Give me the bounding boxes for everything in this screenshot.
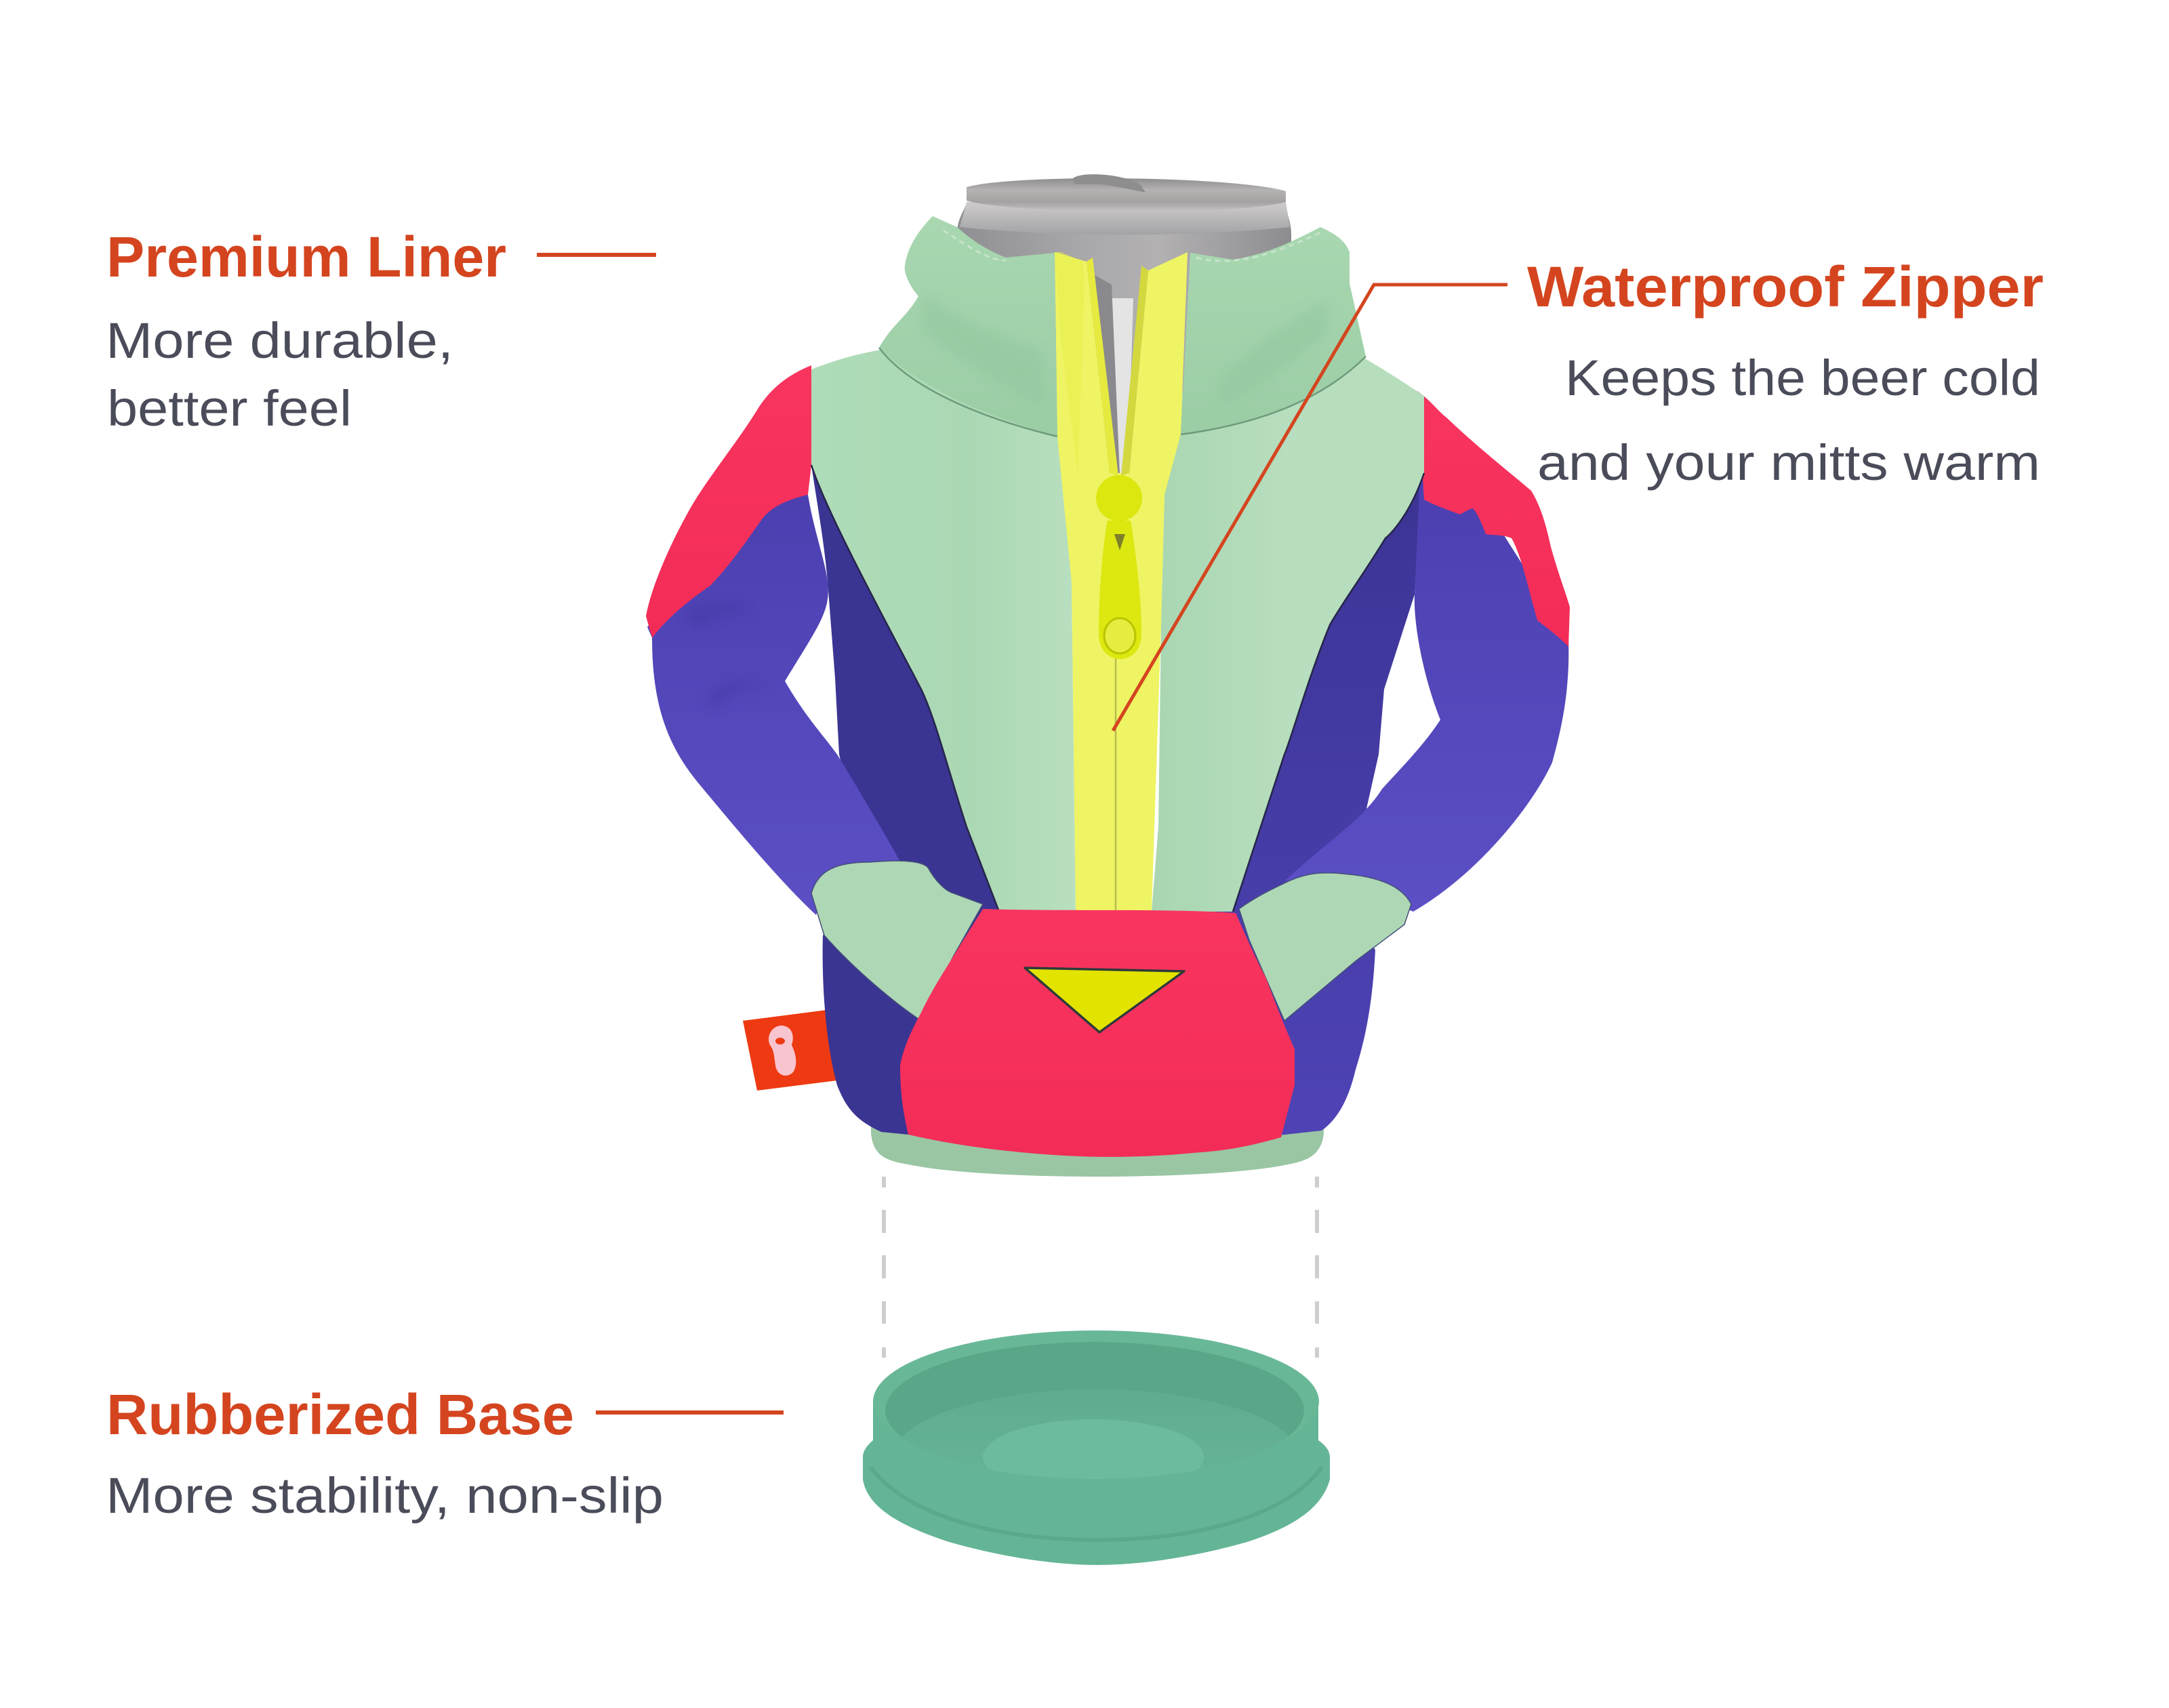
collar folds [922, 291, 1329, 407]
callout: Waterproof Zipper [1113, 255, 2044, 731]
text: Keeps the beer cold and your mitts warm: and your mitts warm [1537, 434, 2040, 491]
product: jacket can cooler [646, 174, 1570, 1177]
left sleeve [646, 365, 902, 915]
leader line: base [596, 1410, 784, 1415]
heading: Rubberized Base: Rubberized Base [106, 1383, 574, 1446]
label tag [743, 1009, 838, 1091]
leader line: zipper [1113, 285, 1507, 731]
right sleeve: purple [1284, 474, 1568, 912]
rubberized base lid [863, 1330, 1330, 1565]
right sleeve: red shoulder [1417, 391, 1570, 647]
torso: right mint panel [1152, 358, 1424, 912]
torso: left mint panel [811, 350, 1076, 912]
text: More durable, better feel: better feel [107, 380, 352, 436]
heading: Waterproof Zipper: Waterproof Zipper [1527, 255, 2044, 319]
left sleeve: purple [647, 488, 902, 915]
lid rim [873, 1330, 1319, 1473]
text: Keeps the beer cold and your mitts warm [1537, 350, 2040, 491]
can [957, 174, 1291, 488]
zipper pull [1096, 475, 1142, 659]
leader line: Premium Liner [537, 253, 656, 257]
text: More durable, better feel [106, 312, 453, 436]
flange edge line [871, 1467, 1322, 1540]
callout: Rubberized Base [106, 1383, 784, 1524]
collar [879, 216, 1366, 436]
text: Keeps the beer cold and your mitts warm: Keeps the beer cold [1565, 350, 2040, 406]
text: More durable, better feel: More durable, [106, 312, 453, 369]
base ring [871, 1118, 1324, 1177]
pocket triangle [1025, 968, 1184, 1032]
zipper tape [1055, 252, 1188, 912]
callout: Premium Liner [106, 225, 656, 436]
left sleeve: red shoulder [646, 365, 811, 638]
panel seams [811, 465, 1424, 912]
front pocket [900, 909, 1295, 1157]
sleeve fold shading [685, 602, 766, 708]
torso: dark side panels [811, 465, 1424, 1145]
lid interior [885, 1342, 1304, 1479]
lid body and flange [863, 1402, 1330, 1565]
text: More stability, non-slip: More stability, non-slip [106, 1467, 664, 1524]
dashed guide lines [882, 1177, 1319, 1358]
lid floor [902, 1419, 1289, 1479]
heading: Premium Liner: Premium Liner [106, 225, 506, 289]
right sleeve [1284, 391, 1570, 912]
right cuff [1239, 873, 1411, 1021]
left cuff [811, 861, 983, 1021]
